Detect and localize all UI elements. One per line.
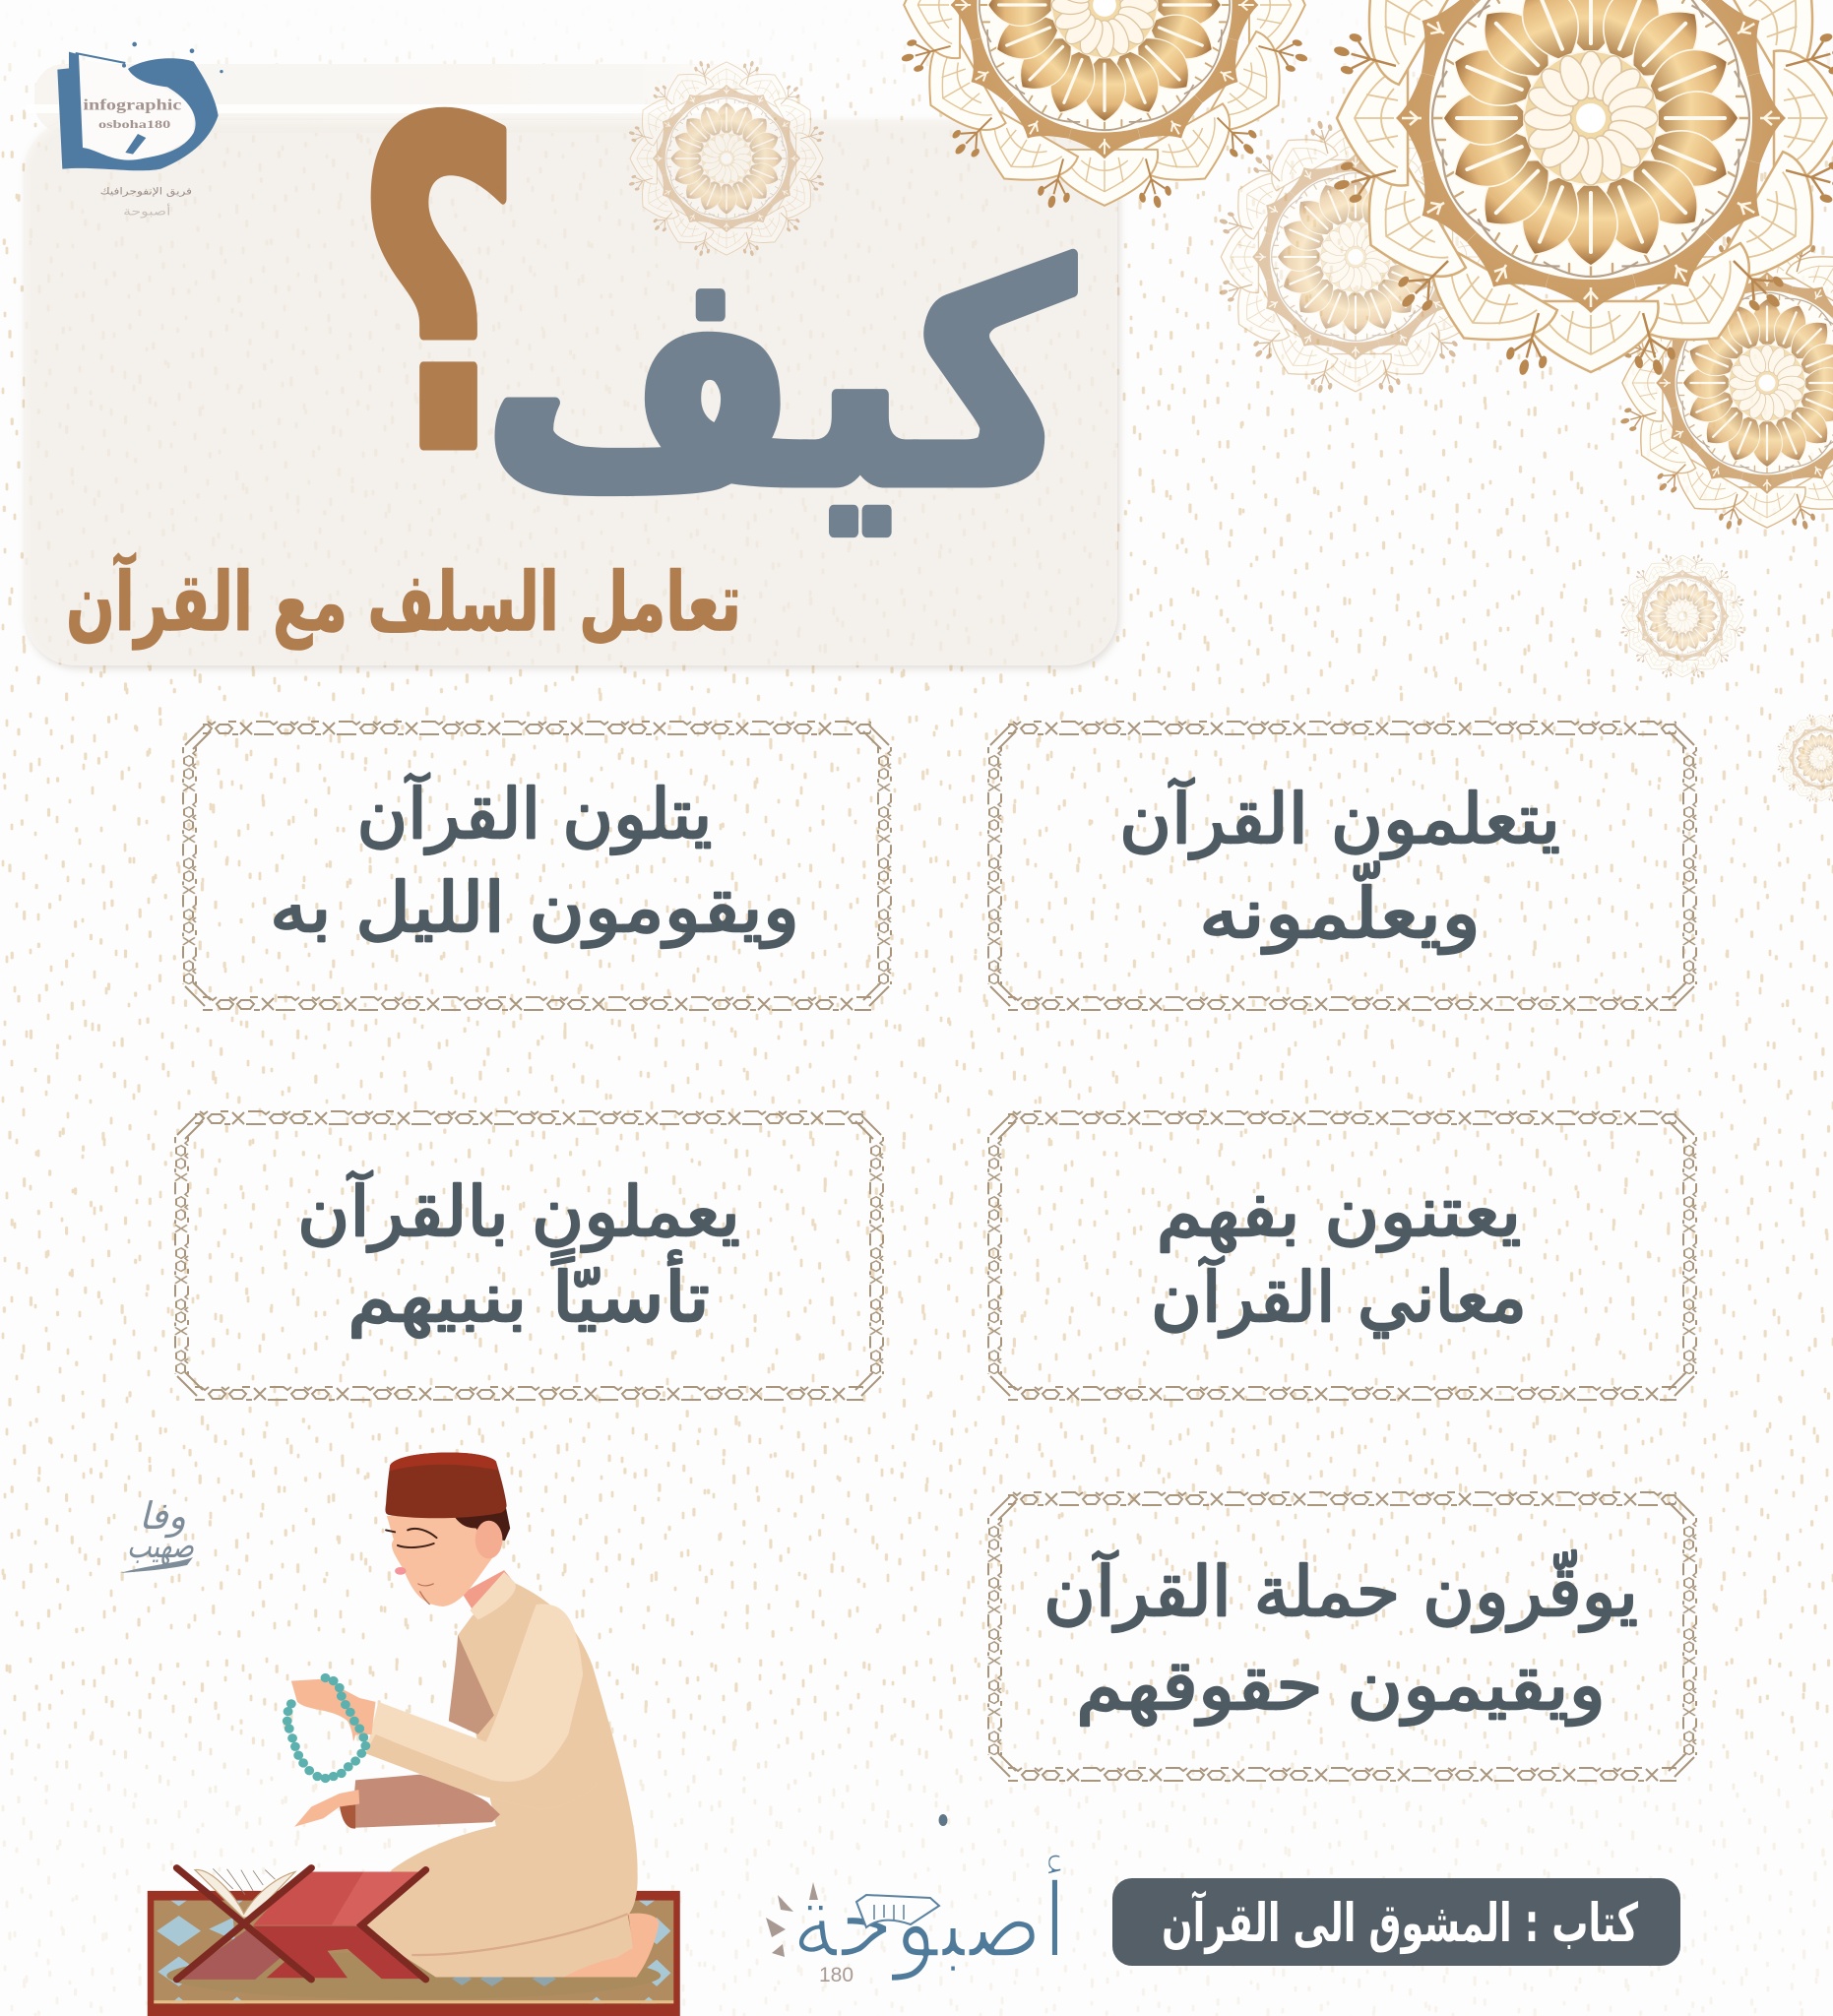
title: question mark: ؟: [354, 31, 522, 551]
panel: box 1 learn and teach: يتعلمون القرآن: [1119, 778, 1560, 859]
mandala: small right: [1619, 553, 1745, 679]
logo: Osboha 180: أصبوحة: [791, 1854, 1067, 1983]
robe body: [355, 1582, 638, 1978]
prayer carpet: [148, 1891, 680, 2016]
mandala: panel ornament: [627, 59, 826, 258]
signature: [120, 1494, 194, 1573]
panel: box 3 understanding: معاني القرآن: [1151, 1256, 1527, 1339]
icon: infographic team logo: [57, 42, 223, 219]
illustration: boy reading the Quran: [148, 1453, 680, 2016]
icon: infographic team logo: أصبوحة: [123, 203, 170, 219]
neck and collar: [462, 1570, 514, 1612]
panel: box 5 honouring bearers: [986, 1490, 1698, 1783]
near arm sleeve: [365, 1605, 597, 1809]
prayer beads: [283, 1673, 370, 1783]
panel: box 5 honouring bearers: يوقّرون حملة القرآن: [1043, 1550, 1638, 1633]
mandala: small edge: [1777, 714, 1833, 802]
upper hand: [291, 1679, 376, 1741]
lower hand: [294, 1790, 359, 1827]
subtitle: تعامل السلف مع القرآن: [66, 552, 741, 650]
reading stand: [177, 1868, 426, 1980]
far arm sleeve: [351, 1775, 500, 1828]
mandala: top centre: [898, 0, 1311, 212]
panel: title background card: [25, 64, 1117, 665]
panel: box 2 recite and night prayer: [181, 720, 893, 1012]
icon: infographic team logo: infographic: [83, 97, 182, 114]
panel: box 3 understanding: [986, 1109, 1698, 1402]
icon: infographic team logo: osboha180: [98, 117, 170, 131]
panel: box 1 learn and teach: [986, 720, 1698, 1012]
panel: box 1 learn and teach: ويعلّمونه: [1199, 862, 1481, 955]
panel: box 2 recite and night prayer: ويقومون الليل به: [270, 867, 799, 949]
panel: box 5 honouring bearers: ويقيمون حقوقهم: [1076, 1645, 1606, 1727]
logo: Osboha 180: 180: [819, 1964, 853, 1986]
title: how: كيف: [482, 204, 1076, 553]
foot: [564, 1914, 659, 1978]
panel: box 4 acting upon it: تأسيّاً بنبيهم: [348, 1249, 710, 1338]
head: [385, 1453, 510, 1606]
panel: box 3 understanding: يعتنون بفهم: [1156, 1171, 1522, 1252]
book: [195, 1868, 295, 1918]
icon: infographic team logo: فريق الإنفوجرافيك: [100, 186, 192, 197]
panel: box 4 acting upon it: [173, 1109, 885, 1402]
dot: [939, 1814, 947, 1826]
panel: box 4 acting upon it: يعملون بالقرآن: [297, 1170, 740, 1252]
panel: box 2 recite and night prayer: يتلون القرآن: [356, 773, 713, 854]
mandala: faded mid: [1217, 118, 1494, 396]
source label: book title: [1112, 1878, 1680, 1966]
mandala: lower right: [1617, 233, 1833, 533]
mandala: large top right: [1329, 0, 1833, 380]
signature: صهيب: [127, 1527, 194, 1566]
signature: وفا: [139, 1494, 186, 1539]
